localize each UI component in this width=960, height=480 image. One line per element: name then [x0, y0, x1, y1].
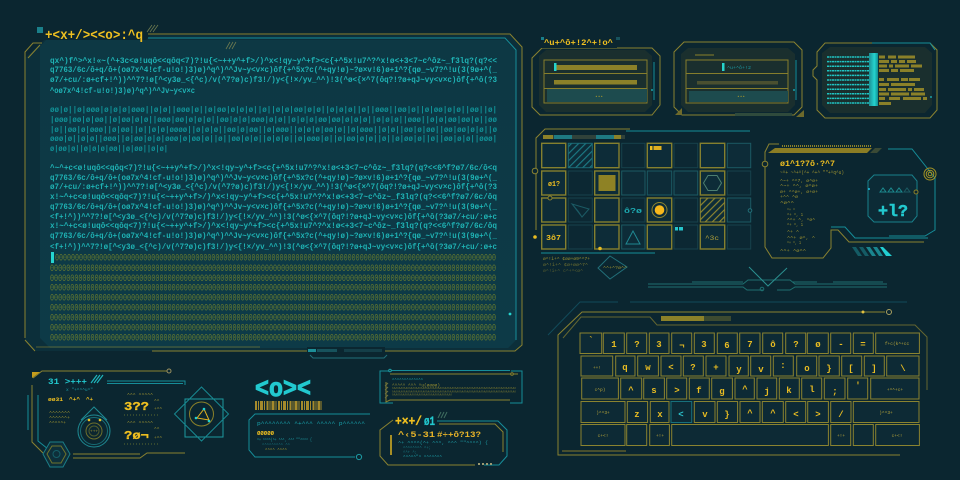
hatch — [91, 375, 103, 383]
row 1 keys: f+c(k^+cc — [885, 341, 909, 347]
scan block — [869, 53, 878, 106]
code lines: ^+ ^, 1 — [787, 212, 803, 218]
heading: authorization: ^u+^ô+!2^+!o^ — [544, 39, 613, 48]
panel: console box: ^^^^^^^^^^^^^^^^^^^^^^^^^^^^^^^^^^^^^^^^^^^^^^^^^^^^^^^^^^^^^^^^^^^^^^^^^ — [392, 386, 516, 392]
yellow bar — [390, 435, 392, 455]
panel: bottom-left dashboard: ^+ — [86, 396, 94, 403]
row 2 keys: ++! — [593, 365, 601, 371]
row 4 keys: < — [678, 410, 684, 420]
text block: placeholder zero rows: 00000000000000000000000000000000000000000000000000000000000000000000000000000000000000000000000000000000000000 — [50, 284, 496, 294]
text block: long paragraph: <f+!^))^^7?!ø[^<y3ø_<{^c)/v(^7?ø)c)f3!/)y<{!×/yv_^^)!3(^ø<{×^7(ôq?!?ø+qJ~vy<v×c)ôf{+^ô(?3ø7/+cu/:ø+c — [50, 213, 497, 222]
corner triangle — [32, 372, 40, 378]
panel: authorization window 2 — [674, 42, 804, 117]
code lines: ø+ ^^ø+, ø+ø+ — [780, 189, 818, 195]
row 2 keys: + — [713, 363, 719, 373]
numbers: ^^^ ^^^^^ — [127, 392, 153, 398]
target circle — [652, 202, 667, 218]
row 2 keys: q — [622, 363, 628, 373]
text block: binary paragraph: |ø||øø|ø|øøø||ø|øø||ø||ø|ø|øøøø||ø|ø|ø||øø|ø|øø||ø|øøø||ø|ø|ø|øø|ø||ø|øøø||ø|ø||øø|ø|øø||øø|øø|ø|ø||ø — [50, 126, 497, 135]
row 4 keys: z — [634, 410, 640, 420]
icon: corner square — [37, 27, 43, 33]
text block: placeholder zero rows: 00000000000000000000000000000000000000000000000000000000000000000000000000000000000000000000000000000000000000 — [50, 294, 496, 304]
row 4 cells — [542, 225, 751, 250]
panel: text dialog: #÷+ô?13? — [437, 430, 481, 440]
row 4 keys: / — [838, 410, 844, 420]
row 3 keys: +^^+c+ — [887, 387, 903, 393]
row 3 keys: ' — [855, 381, 861, 391]
icon: cursor — [554, 63, 556, 71]
panel: code snippet box: ^^^^^^^^^ ^^ — [262, 442, 290, 448]
text block: long paragraph: x!~^+c<ø!uqô<<qôq<7)?!u{<~++y^+f>/)^x<!qy~y^+f><c{+^5x!u7^?^x!ø<+3<7~c^ôz~_f3lq?(q?<<6^f?ø7/6c/ôq — [50, 222, 497, 231]
row 2 keys: y — [736, 365, 742, 375]
panel: text dialog: ^^+ ^; — [403, 450, 417, 456]
panel: code snippet box: ^+ ^^^^(^+ ^^^, ^^^ ""^^^^ { — [257, 437, 312, 443]
row 2 keys: \ — [900, 364, 906, 374]
row 1 keys: ¬ — [679, 341, 685, 351]
icon: indicator dot — [509, 313, 511, 315]
text block: long paragraph: ø7/+cu/:ø+cf+!^))^^7?!ø[^<y3ø_<{^c)/v(^7?ø)c)f3!/)y<{!×/yv_^^)!3(^ø<{×^7(ôq?!?ø+qJ~vy<v×c)ôf{+^ô(?3 — [50, 183, 497, 192]
hexagon icon — [43, 442, 70, 467]
panel: console box: ^^^^^^^^^^^^^^^^^^^^^^^^^^^^^^^^^^^^^^^^^^^^^^^^^^^^^^^^^^^^^^^^^^^^^^^^^ — [392, 390, 516, 396]
text block: long paragraph — [50, 164, 497, 252]
panel: code snippet box: p^^^^^^^^ ^+^^^ ^^^^^ p^^^^^^ — [257, 420, 365, 427]
code lines: ~^+ ~^+^(^+ ^+^ ""+^q^u) — [780, 170, 844, 176]
legend text: ø^!i+^ c^+^<ø^ — [543, 268, 583, 274]
code lines: +^^ ^ø — [780, 194, 798, 200]
legend text: ø^!i+^ ¢ø+øø^7^ — [543, 262, 588, 268]
decorative connector with crossing lines — [648, 267, 887, 291]
code lines: ^^+ ^ø^^ — [780, 248, 806, 254]
dot marker — [533, 235, 537, 239]
hexagon icon — [704, 176, 722, 190]
panel: console box — [380, 369, 522, 403]
text block: placeholder zero rows: 00000000000000000000000000000000000000000000000000000000000000000000000000000000000000000000000000000000000000 — [50, 324, 496, 334]
panel: console box: ^^^^^ ^^^ ^u(øøøø) — [392, 382, 440, 388]
status strip — [307, 347, 387, 358]
text block: binary paragraph — [50, 106, 497, 154]
numbers — [124, 392, 162, 444]
strip of small squares — [543, 135, 625, 139]
row 1 keys: = — [860, 340, 866, 350]
logo: code: <o>< — [255, 374, 311, 404]
row 4 keys — [581, 402, 919, 422]
text block: long paragraph: x!~^+c<ø!uqô<<qôq<7)?!u{<~++y^+f>/)^x<!qy~y^+f><c{+^5x!u7^?^x!ø<+3<7~c^ôz~_f3lq?(q?<<6^f?ø7/6c/ôq — [50, 193, 497, 202]
row 3 keys: l — [809, 385, 815, 395]
text block: first paragraph: ø7/+cu/:ø+cf+!^))^^7?!ø[^<y3ø_<{^c)/v(^7?ø)c)f3!/)y<{!×/yv_^^)!3(^ø<{×^7(ôq?!?ø+qJ~vy<v×c)ôf{+^ô(?3 — [50, 76, 497, 85]
text block: first paragraph — [50, 57, 497, 96]
labels: x "+^^^u^" — [66, 387, 93, 393]
small text: ^^^^^+ — [49, 420, 66, 426]
panel: console box: ^^^^^^^^^^^^^ — [392, 377, 423, 383]
row 2 keys: w — [645, 363, 651, 373]
subheading: ^‹5-31 — [398, 430, 435, 440]
small text — [49, 410, 70, 426]
code lines: ^^+ ^, ^ø^ — [787, 217, 815, 223]
label: 3ô7 — [546, 235, 561, 243]
icon: target ring — [924, 168, 936, 180]
dots — [478, 463, 494, 465]
panel: text dialog: ø1 — [424, 414, 435, 429]
row 5 keys: +!+ — [656, 433, 664, 439]
code lines: ^~+ ^^, ø^ø+ — [780, 183, 818, 189]
yellow tag — [650, 146, 652, 150]
row 1 keys: 3 — [656, 340, 662, 350]
numbers: ^^ — [154, 398, 160, 404]
row 4 keys: ^ — [770, 409, 776, 419]
panel: text decoding main window — [25, 25, 522, 358]
heading: 31 >+++ — [48, 377, 87, 387]
cyan label: ô?ø — [624, 208, 642, 216]
numbers: ?ø¬ — [124, 429, 149, 443]
row 3 keys: s — [651, 386, 657, 396]
row 3 keys: ^ — [628, 386, 634, 396]
row 3 keys: k — [786, 386, 792, 396]
progress bar — [661, 316, 731, 321]
code lines: ^~+ ^^7, ø^ø+ — [780, 178, 818, 184]
panel: code snippet box: ^^^^ ^^^^ — [265, 447, 287, 453]
row 4 keys: v — [702, 410, 708, 420]
cyan stripes — [852, 247, 892, 256]
row 3 keys: g — [719, 387, 725, 397]
text block: long paragraph: q7763/6c/ô+q/ô+(oø7x^4!cf-u!o!)3)ø)^q^)^^Jv~y<v×c)ôf{+^5x?c(^+qy!ø)~?ø×v!6)ø+1^?{qø_~v7?^!u(3(9ø+^(_ — [50, 174, 497, 183]
text block: first paragraph: ^oø7x^4!cf-u!o!)3)ø)^q^)^^Jv~y<v×c — [50, 87, 195, 96]
row 3 keys: j — [764, 387, 770, 397]
text block: placeholder zero rows: 00000000000000000000000000000000000000000000000000000000000000000000000000000000000000000000000000000000000000 — [50, 304, 496, 314]
text block: placeholder zero rows: 00000000000000000000000000000000000000000000000000000000000000000000000000000000000000000000000000000000000000 — [50, 314, 496, 324]
row 3 keys: f — [696, 386, 702, 396]
panel: bottom-left dashboard: ^+^ — [69, 396, 81, 403]
text block: first paragraph: q7763/6c/ô+q/ô+(oø7x^4!cf-u!o!)3)ø)^q^)^^Jv~y<v×c)ôf{+^5x?c(^+qy!ø)~?ø×v!6)ø+1^?{qø_~v7?^!u(3(9ø+^(_ — [50, 66, 497, 75]
label: ø1? — [548, 181, 560, 189]
row 1 keys: ô — [770, 340, 776, 350]
row 1 keys: ` — [588, 336, 594, 346]
code lines: ^+ ^ — [787, 207, 795, 213]
code lines: ^ø^^ — [780, 200, 794, 206]
heading: +×+/ — [395, 414, 422, 429]
label: ^3c — [705, 234, 719, 242]
panel: keyboard — [548, 302, 927, 455]
icon: cursor — [722, 63, 724, 71]
row 1 cells — [542, 143, 751, 168]
ring marker — [532, 168, 538, 174]
radar teardrop: +++ — [90, 430, 98, 434]
cyan tag — [675, 227, 678, 230]
heading: title: +<x+/><<o>:^q — [45, 28, 143, 44]
hatch strip — [782, 145, 872, 147]
title bar — [768, 148, 872, 153]
masked olive text — [879, 56, 927, 105]
row 1 keys: 3 — [701, 340, 707, 350]
row 2 keys: o — [804, 364, 810, 374]
code lines: ^+ ^ — [787, 229, 799, 235]
panel: authorization window 1: ••• — [595, 95, 603, 100]
icon: slashes — [147, 25, 236, 49]
text block: placeholder zero rows: 00000000000000000000000000000000000000000000000000000000000000000000000000000000000000000000000000000000000000 — [50, 274, 496, 285]
row 5 keys — [581, 424, 919, 446]
text block: long paragraph: q7763/6c/ô+q/ô+(oø7x^4!cf-u!o!)3)ø)^q^)^^Jv~y<v×c)ôf{+^5x?c(^+qy!ø)~?ø×v!6)ø+1^?{qø_~v7?^!u(3(9ø+^(_ — [50, 203, 497, 212]
row 5 keys: c+<! — [598, 433, 608, 439]
panel: authorization window 1 — [532, 48, 660, 115]
panel: console box: ^^^^^^^^^^^^^^^^^^^^^^^^^^^^^^^^^^ — [392, 392, 452, 398]
dot slider — [862, 310, 864, 314]
row 3 keys: ; — [832, 387, 838, 397]
triangle icon — [572, 204, 589, 217]
row 4 keys: < — [793, 410, 799, 420]
row 2 keys: ] — [871, 364, 877, 374]
row 4 keys: } — [724, 410, 730, 420]
row 4 keys: )^^3+ — [596, 410, 610, 416]
row 5 keys: +!+ — [837, 433, 845, 439]
panel: authorization window 2: ^u+^ô+!2 — [727, 65, 751, 71]
icon: text cursor — [51, 252, 54, 263]
row 4 keys: )^^3+ — [879, 410, 893, 416]
row 1 keys: ? — [793, 340, 799, 350]
panel: bottom-left dashboard — [28, 369, 228, 467]
scan lines — [827, 57, 872, 103]
row 2 keys — [581, 356, 919, 376]
row 3 keys: c^p) — [595, 387, 605, 393]
ring marker — [167, 369, 171, 373]
text block: long paragraph: <f+!^))^^7?!ø[^<y3ø_<{^c)/v(^7?ø)c)f3!/)y<{!×/yv_^^)!3(^ø<{×^7(ôq?!?ø+qJ~vy<v×c)ôf{+^ô(?3ø7/+cu/:ø+c — [50, 243, 497, 252]
row 4 keys: > — [815, 410, 821, 420]
row 3 keys: > — [674, 386, 680, 396]
panel: text dialog: ^^^^^"^ ^^^^^^^ — [403, 454, 442, 460]
row 3 keys — [582, 378, 919, 399]
row 1 keys — [580, 333, 919, 354]
hatch — [438, 412, 447, 418]
octagon display — [868, 175, 918, 222]
heading: authorization — [541, 37, 620, 48]
text block: placeholder zero rows — [50, 254, 496, 344]
triangle — [626, 231, 640, 244]
text block: placeholder zero rows: 00000000000000000000000000000000000000000000000000000000000000000000000000000000000000000000000000000000000000 — [50, 334, 496, 344]
text block: long paragraph: q7763/6c/ô+q/ô+(oø7x^4!cf-u!o!)3)ø)^q^)^^Jv~y<v×c)ôf{+^5x?c(^+qy!ø)~?ø×v!6)ø+1^?{qø_~v7?^!u(3(9ø+^(_ — [50, 232, 497, 241]
numbers: 3?? — [124, 400, 149, 414]
row 1 keys: - — [838, 340, 844, 350]
row 2 keys: } — [826, 364, 832, 374]
panel: code snippet box — [249, 414, 370, 460]
row 2 keys: [ — [848, 364, 854, 374]
dot — [598, 247, 602, 250]
code lines: ^^+ ø^, ^ — [787, 235, 815, 241]
row 4 keys: ^ — [747, 409, 753, 419]
code lines: ^+ ^, 1 — [787, 240, 801, 246]
row 1 keys: ø — [815, 340, 821, 350]
panel: bottom-left dashboard: øø31 — [48, 396, 64, 403]
row 2 keys: < — [668, 363, 674, 373]
small text: ^^^^^^^ — [49, 410, 70, 416]
row 3 keys: ^ — [742, 385, 748, 395]
row 4 keys: x — [657, 410, 663, 420]
octagon display: +l? — [878, 203, 908, 222]
text block: placeholder zero rows: 00000000000000000000000000000000000000000000000000000000000000000000000000000000000000000000000000000000000000 — [50, 264, 496, 275]
ring marker — [762, 161, 768, 167]
row 2 keys: v — [758, 365, 764, 375]
row 1 keys: 6 — [724, 341, 730, 351]
hatch — [385, 383, 388, 398]
code lines — [780, 170, 844, 254]
code lines: ^+ ^^^^(^+ ^^^, ^^^ ""^^^^) { — [398, 440, 488, 446]
diamond tag: ^^+^?ø^^ — [603, 265, 627, 271]
panel: data scanning window — [813, 43, 937, 118]
panel: code snippet box: øøøøø — [257, 430, 274, 438]
rotated squares with triangle network — [174, 387, 228, 441]
row 5 keys: c+<! — [892, 433, 902, 439]
row 2 cells — [542, 171, 751, 195]
panel: authorization window 2: ••• — [737, 95, 745, 100]
text block: long paragraph: ^~^+c<ø!uqô<<qôq<7)?!u{<~++y^+f>/)^x<!qy~y^+f><c{+^5x!u7^?^x!ø<+3<7~c^ôz~_f3lq?(q?<<6^f?ø7/6c/ô<q — [50, 164, 497, 173]
heading: ø1^1?7ô·?^7 — [780, 160, 835, 169]
numbers: +^^ — [154, 435, 162, 441]
row 1 keys: ? — [634, 340, 640, 350]
text block: first paragraph: qx^)f^>^x!«~(^+3c<ø!uqô<<qôq<7)?!u{<~++y^+f>/)^x<!qy~y^+f><c{+^5x!u7^?^x!ø<+3<7~c^ôz~_f3lq?(q?<< — [50, 57, 497, 66]
row 2 keys: : — [780, 361, 786, 371]
text block: placeholder zero rows: 00000000000000000000000000000000000000000000000000000000000000000000000000000000000000000000000000000000000000 — [55, 254, 496, 264]
barcode — [255, 401, 322, 410]
numbers: ^^ — [154, 426, 160, 432]
row 2 keys: ? — [690, 363, 696, 373]
numbers: ^^^ ^^^^^ — [127, 420, 153, 426]
text block: binary paragraph: øøø|ø||ø|ø||øøø||ø|øø|ø|ø|øøø|ø|øø|ø||ø||øø|ø|ø||ø|ø|ø||ø|øøø|ø||ø|øø|ø|ø||ø||ø|øø|ø||ø||øø|ø|ø||øøø| — [50, 135, 497, 144]
small text: ^^^^^^+ — [49, 415, 70, 421]
text block: binary paragraph: ø|øø|ø||ø|ø|ø|øø||ø|øø||ø|ø| — [50, 145, 168, 154]
legend text: ø^!i+^ ¢øø+ø9^^7+ — [543, 256, 590, 262]
numbers: +^^ — [154, 406, 162, 412]
row 3 cells — [542, 196, 752, 222]
text block: binary paragraph: |øøø|øø|ø|øø||ø|øø|ø|ø||øøø|øø|ø|ø|ø||øø|ø|ø|øøø|ø|ø||ø|ø|ø|øø|øø|ø|ø|ø||ø|ø|ø||øøø||ø|ø|øø|øø|ø||øø — [50, 116, 497, 125]
diamond tag — [598, 256, 627, 279]
filled square — [598, 175, 616, 191]
panel: cell grid — [532, 129, 752, 279]
radar teardrop — [78, 407, 110, 447]
row 1 keys: 1 — [611, 340, 617, 350]
panel: text dialog — [380, 412, 507, 465]
legend text — [543, 256, 590, 274]
row 1 keys: 7 — [747, 340, 753, 350]
panel: text dialog: ^^^^^^^^ ^+; — [403, 445, 431, 451]
code lines: ^+ ^, 1 — [787, 222, 803, 228]
text block: binary paragraph: øø|ø||ø|øøø|ø|ø|ø|øøø||ø|ø||øøø|ø||ø|øø|ø|ø|ø||ø||ø|ø|øø|ø|ø||ø|ø|ø||ø||øøø||øø|ø||ø|øø|ø|ø||øø||ø| — [50, 106, 497, 115]
panel: code terminal — [762, 144, 936, 258]
